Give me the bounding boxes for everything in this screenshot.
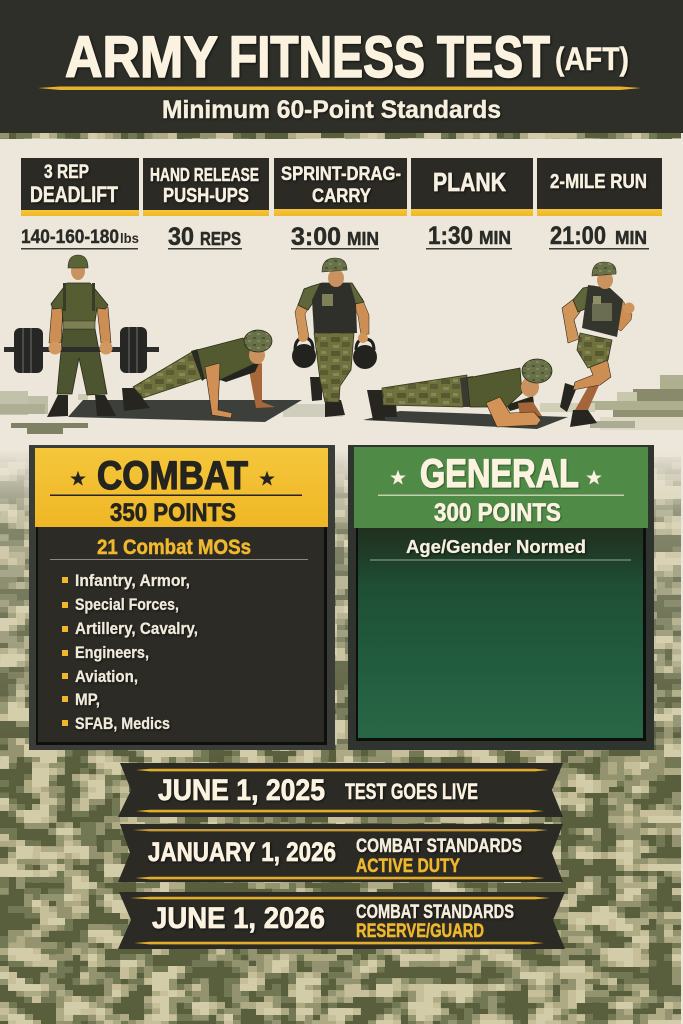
combat MOS subheading: 21 Combat MOSs [97, 536, 251, 559]
ground camo patch right [540, 375, 683, 430]
general heading: 300 POINTS [434, 499, 561, 527]
combat MOS list: SFAB, Medics [75, 714, 170, 733]
combat heading: 350 POINTS [110, 499, 236, 527]
figure: soldier push-up on mat [68, 330, 302, 422]
standard: push-up reps: REPS [200, 229, 241, 249]
standard: push-up reps: 30 [168, 223, 194, 251]
title: TEST [437, 25, 550, 90]
standard: sprint-drag-carry time: MIN [347, 229, 379, 249]
exercise header: plank [411, 158, 533, 216]
gold rule [38, 86, 641, 90]
combat MOS list [62, 571, 198, 733]
exercise header: deadlift: 3 REP [44, 162, 89, 183]
general heading [378, 452, 624, 527]
combat MOS list: Infantry, Armor, [75, 571, 190, 590]
title: (AFT) [555, 41, 629, 77]
ribbon: June 1, 2025: JUNE 1, 2025 [158, 774, 325, 807]
figure: soldier plank on mat [363, 359, 568, 429]
figure: soldier running [560, 262, 634, 427]
panel: combat [29, 445, 335, 750]
exercise header: sprint-drag-carry [274, 158, 407, 216]
general heading: GENERAL [420, 452, 579, 496]
general subheading: Age/Gender Normed [406, 537, 586, 557]
subtitle: Minimum 60-Point Standards [162, 96, 501, 124]
exercise header: sprint-drag-carry: SPRINT-DRAG- [281, 164, 401, 185]
paper section [0, 139, 683, 760]
exercise header: 2-mile run: 2-MILE RUN [550, 171, 647, 193]
ground shadow carry [283, 404, 343, 417]
standard: run time: 21:00 [550, 222, 606, 250]
combat MOS list: Engineers, [75, 643, 149, 662]
ribbon: June 1, 2025: TEST GOES LIVE [345, 779, 478, 804]
standard: sprint-drag-carry time [291, 223, 379, 251]
standard: deadlift weight: 140-160-180 [21, 227, 119, 248]
combat MOS list: MP, [75, 690, 100, 709]
combat MOS list: Aviation, [75, 667, 138, 686]
figure: soldier deadlift [4, 255, 159, 417]
standard: plank time [426, 222, 512, 250]
exercise header: push-ups [143, 158, 269, 216]
standard: run time [549, 222, 649, 250]
title [65, 25, 629, 90]
ribbon: January 1, 2026: JANUARY 1, 2026 [148, 837, 336, 867]
exercise header: deadlift [21, 158, 139, 216]
combat heading: COMBAT [97, 454, 248, 498]
title: ARMY [65, 25, 218, 90]
ground camo patch left [0, 391, 88, 415]
exercise header: 2-mile run [537, 158, 662, 216]
ribbon: June 1, 2026: COMBAT STANDARDS [356, 902, 514, 923]
standard: plank time: MIN [479, 228, 511, 248]
combat MOS list: Artillery, Cavalry, [75, 619, 198, 638]
ribbon: June 1, 2026: JUNE 1, 2026 [152, 902, 325, 935]
combat heading [50, 454, 302, 527]
panel: general [348, 445, 654, 750]
ribbon: June 1, 2026: RESERVE/GUARD [356, 921, 484, 942]
standard: sprint-drag-carry time: 3:00 [291, 223, 341, 251]
header band [0, 0, 683, 133]
ribbon: June 1, 2025 [118, 763, 563, 817]
standard: run time: MIN [615, 228, 647, 248]
combat MOS list: Special Forces, [75, 595, 179, 614]
exercise header: sprint-drag-carry: CARRY [312, 186, 371, 207]
exercise header: push-ups: PUSH-UPS [163, 185, 249, 207]
exercise header: plank: PLANK [433, 167, 506, 197]
ribbon: June 1, 2026 [118, 892, 565, 949]
ground camo patch lower left [11, 423, 88, 434]
exercise header: push-ups: HAND RELEASE [150, 165, 259, 185]
ribbon: January 1, 2026: COMBAT STANDARDS [356, 836, 522, 857]
standard: plank time: 1:30 [428, 222, 473, 250]
exercise header: deadlift: DEADLIFT [30, 182, 118, 207]
figure: soldier carrying kettlebells [292, 258, 377, 417]
standard: deadlift weight: lbs [120, 230, 139, 246]
standard: push-up reps [168, 223, 242, 251]
title: FITNESS [229, 25, 425, 90]
ribbon: January 1, 2026: ACTIVE DUTY [356, 856, 460, 877]
ribbon: January 1, 2026 [118, 824, 563, 882]
